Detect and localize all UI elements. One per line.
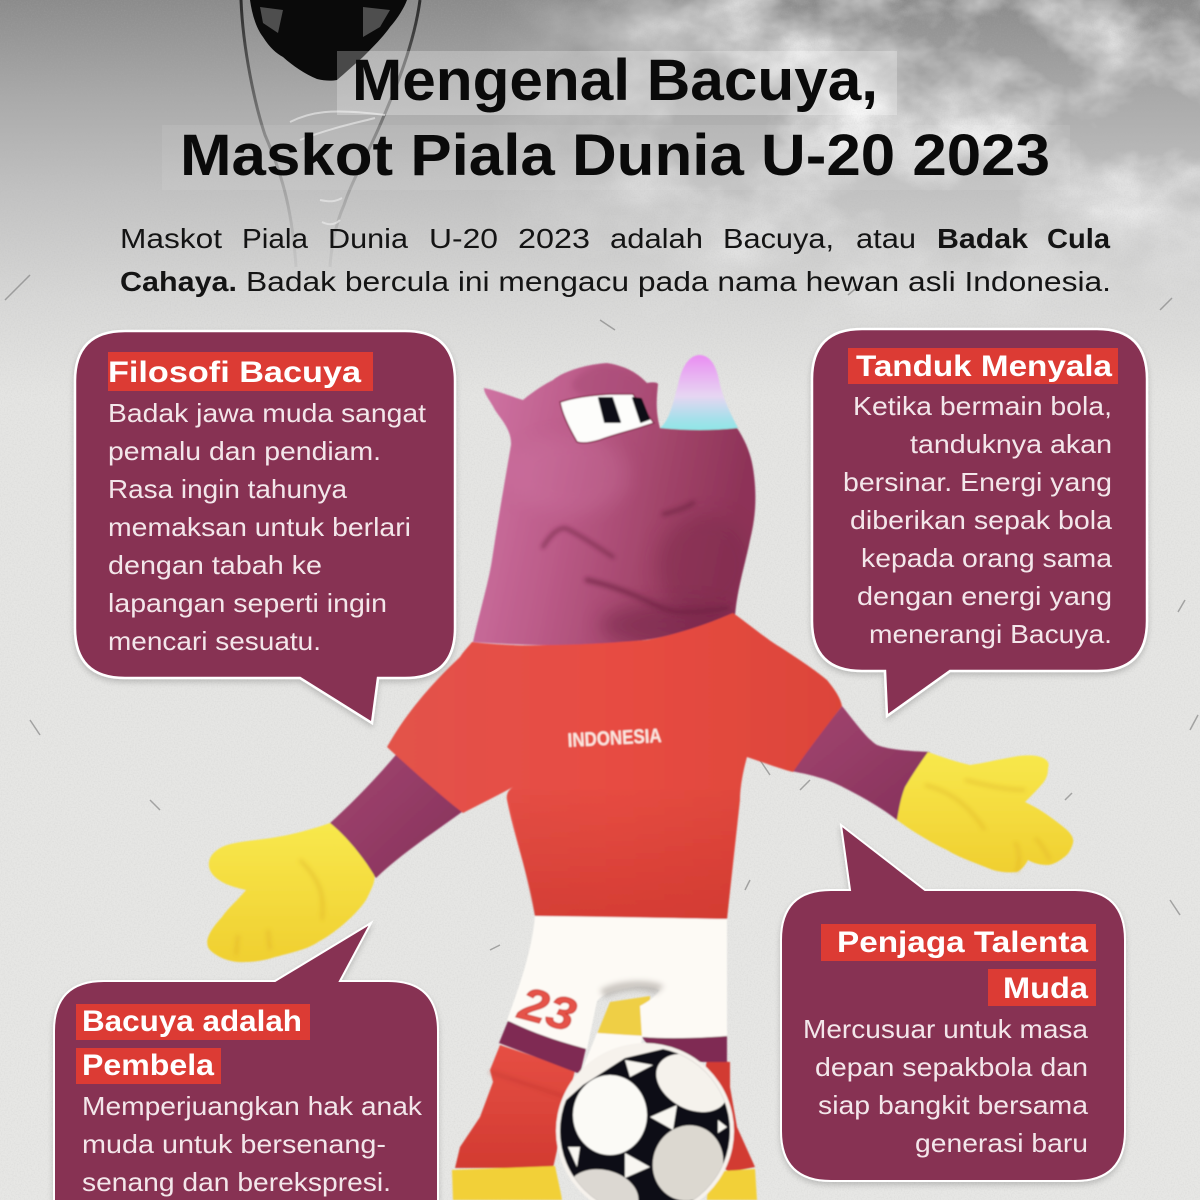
red shirt — [387, 613, 842, 919]
speech bubble — [812, 329, 1147, 716]
heading: Tanduk Menyala — [856, 350, 1112, 383]
body text: diberikan sepak bola — [850, 505, 1113, 535]
body text: Memperjuangkan hak anak — [82, 1091, 423, 1121]
heading: Pembela — [82, 1049, 214, 1082]
body text — [803, 1014, 1089, 1158]
face shading — [538, 368, 745, 642]
inner yellow — [597, 996, 650, 1036]
heading: Muda — [1003, 972, 1088, 1005]
speech bubble — [75, 331, 455, 723]
mascot: Bacuya — [207, 355, 1073, 1200]
body text: bersinar. Energi yang — [843, 467, 1112, 497]
panel: Bacuya adalah Pembela — [54, 923, 438, 1200]
body text: siap bangkit bersama — [818, 1090, 1089, 1120]
heading: Penjaga Talenta — [837, 926, 1088, 959]
body text — [108, 398, 427, 656]
body text: mencari sesuatu. — [108, 626, 321, 656]
body text: Rasa ingin tahunya — [108, 474, 348, 504]
shorts number 23: 23 — [513, 976, 582, 1041]
intro paragraph: 2023 — [518, 223, 590, 254]
white below inner leg — [582, 1033, 642, 1070]
football — [550, 1042, 740, 1200]
panel: Filosofi Bacuya — [75, 331, 455, 723]
right hand — [897, 752, 1073, 872]
shorts — [507, 916, 727, 1049]
body text: pemalu dan pendiam. — [108, 436, 381, 466]
shirt logo: INDONESIA — [567, 725, 662, 752]
panel: Tanduk Menyala — [812, 329, 1147, 716]
shorts shadow — [600, 981, 664, 998]
body text: senang dan berekspresi. — [82, 1167, 391, 1197]
body text: generasi baru — [915, 1128, 1088, 1158]
head — [473, 363, 755, 647]
intro paragraph: Cula — [1047, 223, 1110, 254]
intro paragraph — [120, 223, 1111, 297]
body text: Badak jawa muda sangat — [108, 398, 427, 428]
title: Mengenal Bacuya, — [352, 48, 878, 113]
body text: memaksan untuk berlari — [108, 512, 411, 542]
body text — [843, 391, 1113, 649]
heading — [76, 1004, 310, 1084]
speech bubble — [781, 825, 1125, 1181]
intro paragraph: adalah — [610, 223, 703, 254]
body text: Ketika bermain bola, — [853, 391, 1112, 421]
title — [162, 48, 1070, 190]
socks and boots — [452, 1021, 757, 1200]
heading — [821, 924, 1096, 1006]
intro paragraph: Cahaya. — [120, 266, 237, 297]
heading: Bacuya adalah — [82, 1005, 302, 1038]
heading: Filosofi Bacuya — [108, 356, 361, 389]
body text: tanduknya akan — [910, 429, 1112, 459]
intro paragraph: Badak — [937, 223, 1028, 254]
intro paragraph: U-20 — [429, 223, 498, 254]
intro paragraph: Badak bercula ini mengacu pada nama hewan asli Indonesia. — [246, 266, 1111, 297]
intro paragraph: Piala — [242, 223, 308, 254]
horn — [660, 355, 738, 430]
intro paragraph: Bacuya, — [723, 223, 834, 254]
eye — [560, 394, 654, 443]
body text: lapangan seperti ingin — [108, 588, 387, 618]
body text: dengan tabah ke — [108, 550, 322, 580]
title: Maskot Piala Dunia U-20 2023 — [180, 123, 1050, 188]
body text: menerangi Bacuya. — [869, 619, 1112, 649]
body text — [82, 1091, 423, 1197]
body text: kepada orang sama — [861, 543, 1113, 573]
intro paragraph: atau — [856, 223, 916, 254]
right arm — [790, 706, 930, 820]
intro paragraph: Dunia — [328, 223, 408, 254]
intro paragraph: Maskot — [120, 223, 222, 254]
body text: Mercusuar untuk masa — [803, 1014, 1089, 1044]
speech bubble — [54, 923, 438, 1200]
body text: muda untuk bersenang- — [82, 1129, 386, 1159]
panel: Penjaga Talenta Muda — [781, 825, 1125, 1181]
body text: dengan energi yang — [857, 581, 1112, 611]
body text: depan sepakbola dan — [815, 1052, 1088, 1082]
left hand — [207, 823, 375, 962]
left arm — [328, 750, 462, 878]
trophy photo — [241, 0, 420, 267]
background: grey sky and paper texture — [0, 0, 1200, 950]
